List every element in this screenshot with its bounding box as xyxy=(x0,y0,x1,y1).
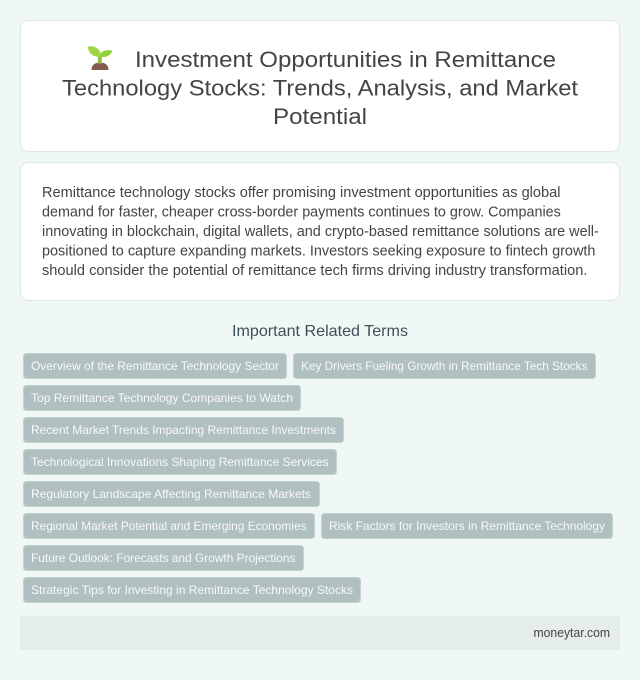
tag: top companies: Top Remittance Technology Companies to Watch xyxy=(31,391,293,405)
text block: summary paragraph: should consider the potential of remittance tech firms driving industry transformation. xyxy=(42,263,587,279)
panel: title card xyxy=(20,20,620,152)
tag: risk factors xyxy=(322,514,612,538)
panel: summary card xyxy=(20,162,620,300)
tag: regional potential xyxy=(24,514,314,538)
heading: important related terms: Important Related Terms xyxy=(232,323,408,340)
tag: regional potential: Regional Market Potential and Emerging Economies xyxy=(31,519,306,533)
tag: regulation: Regulatory Landscape Affecting Remittance Markets xyxy=(31,487,311,501)
tag: future outlook: Future Outlook: Forecasts and Growth Projections xyxy=(31,551,296,565)
tag: strategic tips: Strategic Tips for Investing in Remittance Technology Stocks xyxy=(31,583,353,597)
tag: innovations xyxy=(24,450,336,474)
tag: market trends: Recent Market Trends Impacting Remittance Investments xyxy=(31,423,336,437)
tag: overview: Overview of the Remittance Technology Sector xyxy=(31,359,279,373)
footer source text: moneytar.com xyxy=(534,626,610,640)
tag: top companies xyxy=(24,386,300,410)
heading: title: Potential xyxy=(273,104,367,129)
tag: strategic tips xyxy=(24,578,360,602)
text block: summary paragraph: Remittance technology stocks offer promising investment opportunities as global xyxy=(42,185,560,201)
tag: future outlook xyxy=(24,546,304,570)
heading: title xyxy=(62,47,579,129)
tag: risk factors: Risk Factors for Investors in Remittance Technology xyxy=(329,519,605,533)
tag: key drivers xyxy=(294,354,596,378)
footer bar xyxy=(20,616,620,650)
heading: title: Investment Opportunities in Remittance xyxy=(135,47,556,72)
text block: summary paragraph: positioned to capture expanding markets. Investors seeking exposure to fintech growth xyxy=(42,244,595,260)
icon: sprout xyxy=(88,46,112,70)
tag list xyxy=(24,354,612,602)
text block: summary paragraph: demand for faster, cheaper cross-border payments continues to grow. Companies xyxy=(42,204,561,220)
tag: innovations: Technological Innovations Shaping Remittance Services xyxy=(31,455,328,469)
tag: market trends xyxy=(24,418,344,442)
tag: key drivers: Key Drivers Fueling Growth in Remittance Tech Stocks xyxy=(301,359,588,373)
tag: overview xyxy=(24,354,286,378)
heading: title: Technology Stocks: Trends, Analysis, and Market xyxy=(62,76,579,100)
tag: regulation xyxy=(24,482,320,506)
text block: summary paragraph xyxy=(42,185,599,279)
text block: summary paragraph: innovating in blockchain, digital wallets, and crypto-based remittance solutions are well- xyxy=(42,224,599,240)
